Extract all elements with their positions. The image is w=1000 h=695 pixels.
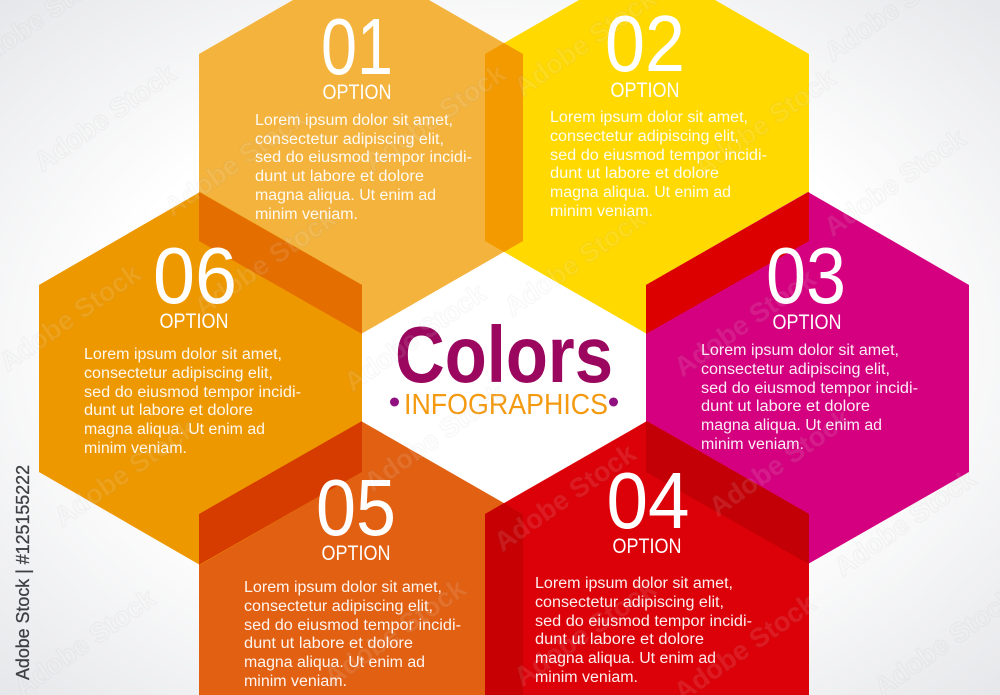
- watermarks: Adobe Stock: [29, 57, 182, 177]
- body text: minim veniam.: [84, 440, 187, 457]
- watermarks: Adobe Stock: [159, 102, 312, 222]
- hexagon 6: [39, 192, 362, 565]
- label: OPTION: [160, 310, 228, 333]
- watermarks: Adobe Stock: [49, 412, 202, 532]
- hexagon 4: [485, 421, 809, 695]
- watermarks: Adobe Stock: [509, 572, 662, 692]
- body text: minim veniam.: [255, 206, 358, 223]
- body text: [255, 112, 472, 223]
- body text: [244, 579, 461, 690]
- overlap 6-1: [199, 192, 362, 334]
- body text: consectetur adipiscing elit,: [244, 598, 433, 615]
- label: OPTION: [612, 535, 682, 558]
- body text: [535, 575, 752, 686]
- body text: sed do eiusmod tempor incidi-: [255, 149, 472, 166]
- watermarks: Adobe Stock: [689, 62, 842, 182]
- overlap 5-6: [199, 421, 362, 565]
- body text: minim veniam.: [550, 203, 653, 220]
- overlap 3-4: [646, 421, 809, 564]
- body text: consectetur adipiscing elit,: [535, 594, 724, 611]
- option 05: [244, 463, 461, 690]
- label: OPTION: [322, 81, 392, 104]
- body text: magna aliqua. Ut enim ad: [535, 650, 716, 667]
- option 04: [535, 456, 752, 686]
- body text: sed do eiusmod tempor incidi-: [244, 617, 461, 634]
- watermarks: Adobe Stock: [339, 277, 492, 397]
- number 05: 05: [316, 463, 396, 552]
- option 02: [550, 0, 767, 220]
- body text: consectetur adipiscing elit,: [701, 361, 890, 378]
- body text: Lorem ipsum dolor sit amet,: [84, 346, 282, 363]
- label: OPTION: [322, 542, 390, 565]
- title word: Colors: Colors: [395, 310, 613, 399]
- label: OPTION: [772, 311, 842, 334]
- body text: [701, 342, 918, 453]
- body text: sed do eiusmod tempor incidi-: [701, 380, 918, 397]
- body text: sed do eiusmod tempor incidi-: [535, 613, 752, 630]
- number 02: 02: [605, 0, 685, 88]
- body text: dunt ut labore et dolore: [550, 165, 719, 182]
- number 03: 03: [766, 231, 846, 320]
- watermarks: Adobe Stock: [359, 377, 512, 497]
- label: OPTION: [610, 79, 680, 102]
- overlap 2-3: [646, 192, 809, 334]
- body text: sed do eiusmod tempor incidi-: [84, 384, 301, 401]
- title: [390, 310, 618, 421]
- body text: [550, 109, 767, 220]
- body text: dunt ut labore et dolore: [244, 635, 413, 652]
- body text: consectetur adipiscing elit,: [255, 131, 444, 148]
- body text: minim veniam.: [244, 673, 347, 690]
- hexagon 5: [199, 421, 523, 695]
- option 03: [701, 231, 918, 453]
- watermarks: Adobe Stock: [319, 572, 472, 692]
- body text: Lorem ipsum dolor sit amet,: [255, 112, 453, 129]
- hexagon 3: [646, 192, 969, 564]
- body text: consectetur adipiscing elit,: [84, 365, 273, 382]
- watermarks: Adobe Stock: [704, 402, 857, 522]
- body text: dunt ut labore et dolore: [84, 402, 253, 419]
- body text: sed do eiusmod tempor incidi-: [550, 147, 767, 164]
- body text: minim veniam.: [701, 436, 804, 453]
- body text: magna aliqua. Ut enim ad: [701, 417, 882, 434]
- number 04: 04: [606, 456, 690, 545]
- option 06: [84, 231, 301, 457]
- body text: [84, 346, 301, 457]
- watermarks: Adobe Stock: [489, 437, 642, 557]
- watermarks: Adobe Stock: [669, 262, 822, 382]
- overlap 4-5: [485, 503, 523, 695]
- watermarks: Adobe Stock: [359, 57, 512, 177]
- body text: magna aliqua. Ut enim ad: [84, 421, 265, 438]
- body text: dunt ut labore et dolore: [255, 168, 424, 185]
- body text: magna aliqua. Ut enim ad: [255, 187, 436, 204]
- option 01: [255, 2, 472, 223]
- body text: dunt ut labore et dolore: [701, 398, 870, 415]
- stock id label: Adobe Stock | #125155222: [13, 465, 33, 680]
- center white hexagon: [362, 252, 646, 502]
- body text: Lorem ipsum dolor sit amet,: [550, 109, 748, 126]
- body text: magna aliqua. Ut enim ad: [550, 184, 731, 201]
- watermarks: Adobe Stock: [189, 202, 342, 322]
- body text: Lorem ipsum dolor sit amet,: [701, 342, 899, 359]
- body text: consectetur adipiscing elit,: [550, 128, 739, 145]
- body text: Lorem ipsum dolor sit amet,: [244, 579, 442, 596]
- number 06: 06: [153, 231, 237, 320]
- watermarks: Adobe Stock: [819, 122, 972, 242]
- subtitle: INFOGRAPHICS: INFOGRAPHICS: [404, 389, 608, 421]
- number 01: 01: [321, 2, 393, 91]
- right dot: [609, 398, 618, 406]
- overlap 1-2: [485, 43, 523, 252]
- hexagon 1: [199, 0, 523, 334]
- body text: dunt ut labore et dolore: [535, 631, 704, 648]
- watermarks: Adobe Stock: [829, 462, 982, 582]
- hexagon 2: [485, 0, 809, 334]
- body text: Lorem ipsum dolor sit amet,: [535, 575, 733, 592]
- body text: magna aliqua. Ut enim ad: [244, 654, 425, 671]
- body text: minim veniam.: [535, 669, 638, 686]
- watermarks: Adobe Stock: [499, 202, 652, 322]
- left dot: [390, 398, 399, 406]
